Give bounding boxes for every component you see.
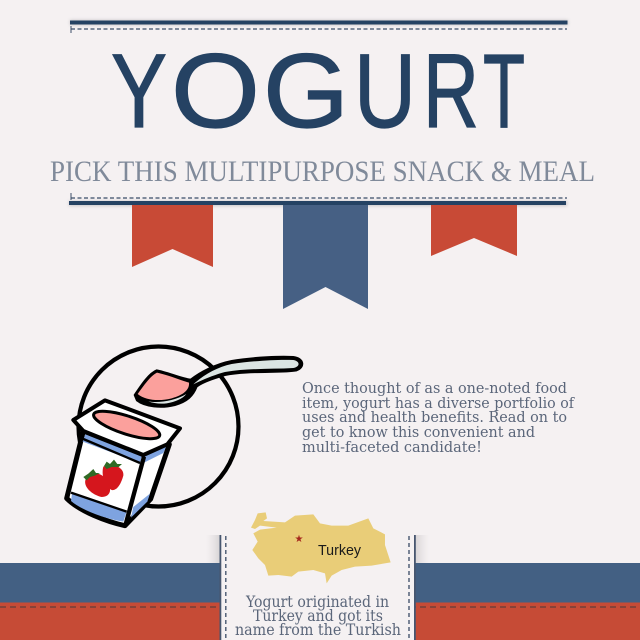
origin text: Yogurt originated in	[245, 592, 389, 611]
subtitle: PICK THIS MULTIPURPOSE SNACK & MEAL	[50, 155, 595, 188]
banner: right red	[431, 205, 517, 256]
map of Turkey	[251, 512, 391, 583]
title: G	[263, 33, 349, 150]
title: Y	[111, 33, 167, 150]
footer bands	[0, 563, 640, 640]
intro text: get to know this convenient and	[302, 423, 535, 441]
strawberries	[83, 460, 123, 497]
title: U	[354, 33, 416, 150]
panel: Turkey origin	[206, 512, 429, 640]
banner: left red	[132, 205, 213, 267]
origin text	[235, 592, 401, 639]
circle outline	[78, 346, 238, 506]
intro text	[302, 379, 575, 456]
origin text: name from the Turkish	[235, 620, 401, 639]
intro text: Once thought of as a one-noted food	[302, 379, 567, 397]
intro text: uses and health benefits. Read on to	[302, 408, 567, 426]
map label: Turkey	[318, 543, 362, 559]
origin text: Turkey and got its	[253, 606, 383, 625]
capital star: ★	[295, 534, 304, 545]
title: R	[423, 33, 479, 150]
bottom rule	[69, 193, 567, 206]
intro text: item, yogurt has a diverse portfolio of	[302, 394, 575, 412]
intro text: multi-faceted candidate!	[302, 438, 482, 456]
spoon	[134, 356, 303, 407]
icon: yogurt cup and spoon	[67, 346, 303, 526]
title: T	[483, 33, 525, 150]
title: O	[171, 33, 260, 150]
top rule	[70, 20, 568, 33]
cup	[67, 400, 180, 526]
banner: centre blue	[283, 205, 368, 309]
